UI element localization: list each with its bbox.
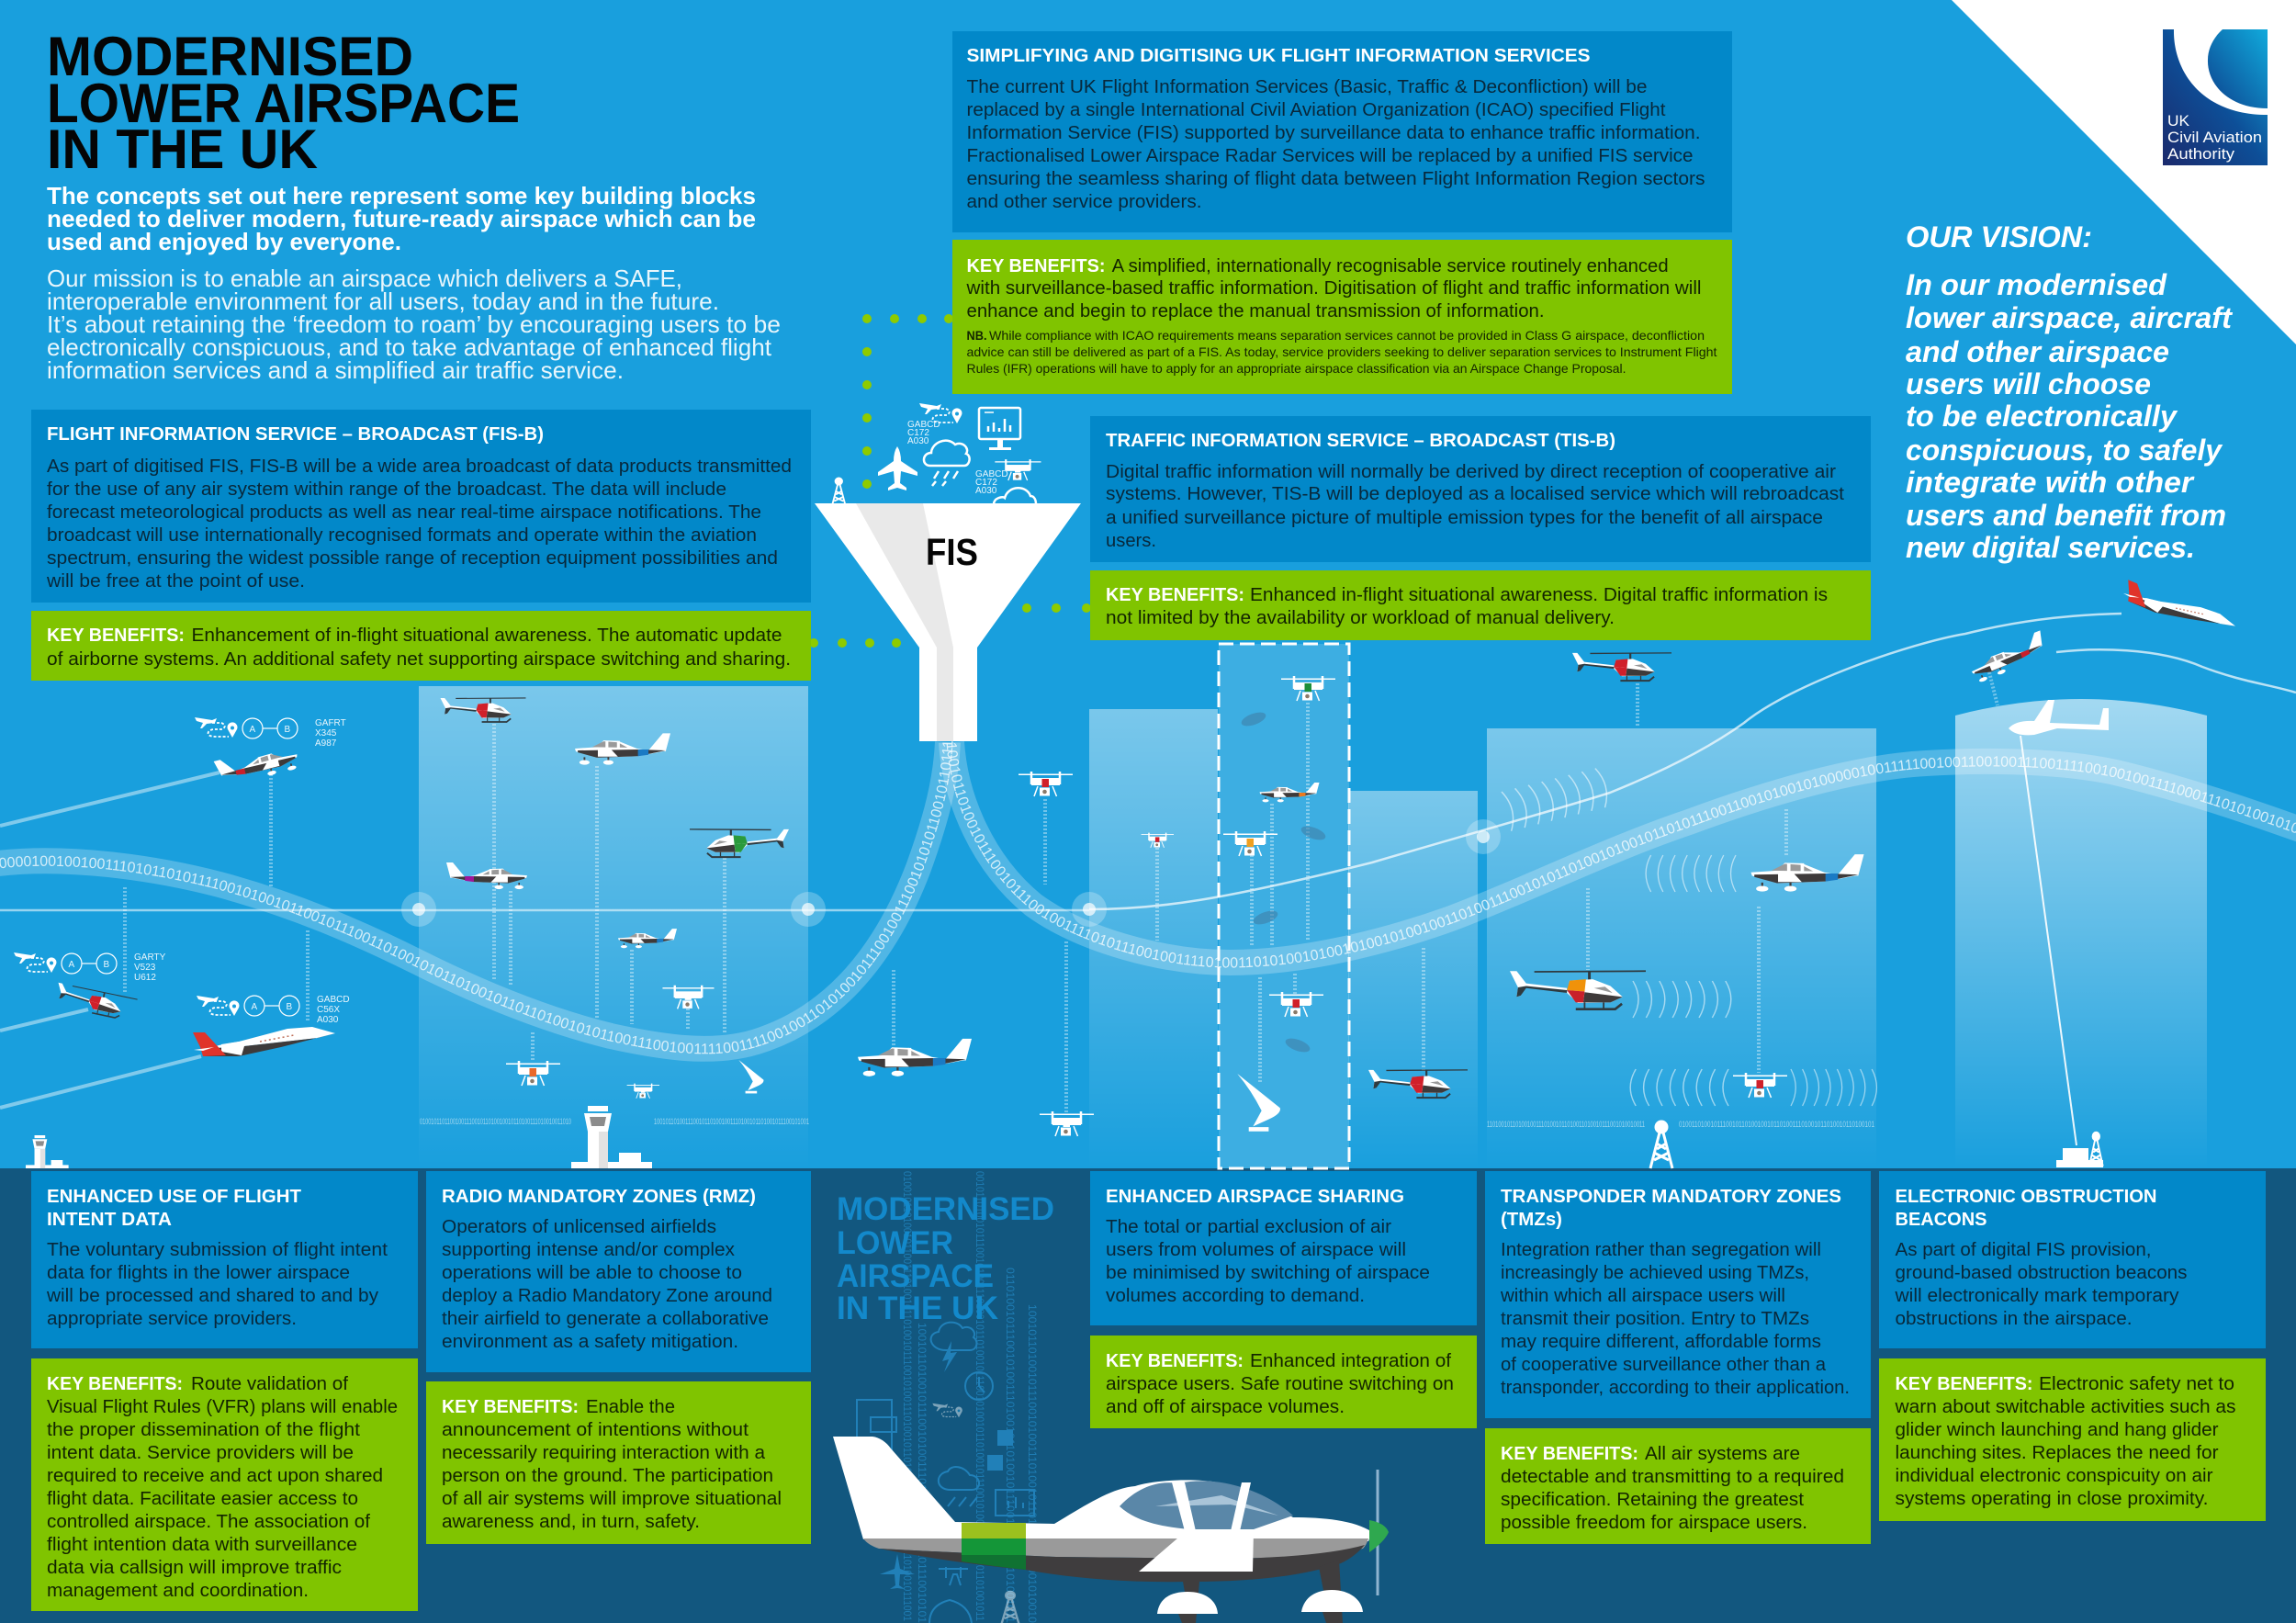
panel: simplifying and digitising: replaced by a single International Civil Aviation Organization (ICAO) specified Flight: [966, 100, 1666, 120]
logo: UK Civil Aviation Authority: UK: [2167, 112, 2190, 130]
flight intent data labels: A: [250, 725, 255, 735]
intro text: mission: interoperable environment for all users, today and in the future.: [47, 287, 719, 315]
panel: simplifying key benefits: NB.: [966, 328, 986, 343]
link nodes: [401, 819, 1501, 927]
panel: electronic obstruction beacons: As part of digital FIS provision,: [1896, 1240, 2151, 1260]
panel: radio mandatory zones key benefits: Enable the: [586, 1397, 675, 1417]
panel: TIS-B key benefits: KEY BENEFITS:: [1106, 585, 1244, 605]
binary data stream left: [0, 741, 961, 1062]
our vision statement: and other airspace: [1906, 335, 2169, 368]
flight intent data labels: A987: [315, 738, 337, 749]
panel: enhanced airspace sharing: be minimised by switching of airspace: [1106, 1263, 1430, 1283]
title: MODERNISED: [47, 26, 413, 87]
panel: transponder key benefits: possible freedom for airspace users.: [1501, 1513, 1807, 1533]
flight intent data labels: GAFRT: [315, 718, 346, 728]
flight intent data labels: GARTY: [134, 952, 166, 963]
binary data stream left: 0000010010010011101011010111100101001011001011100110100101011010010110110100101011001110010011110011110010011010100101110010011100101010110010110111001001011101110101110010110110: [0, 741, 953, 1054]
panel: airspace sharing key benefits: Enhanced integration of: [1250, 1351, 1451, 1371]
large aircraft illustration: [833, 1437, 1389, 1623]
FIS input icons: GABCD: [975, 469, 1008, 479]
flight intent data labels: B: [285, 725, 290, 735]
panel: TIS-B: Digital traffic information will normally be derived by direct reception of cooperative air: [1106, 462, 1836, 482]
flight intent data labels: X345: [315, 728, 337, 738]
our vision statement: integrate with other: [1906, 466, 2195, 499]
panel: flight intent key benefits: Visual Flight Rules (VFR) plans will enable: [47, 1397, 398, 1417]
panel: simplifying and digitising: Information Service (FIS) supported by surveillance data to enhance traffic information.: [966, 123, 1701, 143]
our vision statement: OUR VISION:: [1906, 220, 2092, 254]
sky background: [0, 0, 2296, 1171]
our vision statement: lower airspace, aircraft: [1906, 301, 2233, 334]
panel: enhanced airspace sharing: The total or partial exclusion of air: [1106, 1217, 1391, 1237]
panel: simplifying and digitising: SIMPLIFYING AND DIGITISING UK FLIGHT INFORMATION SERVICES: [966, 46, 1591, 66]
panel: simplifying key benefits: KEY BENEFITS:: [966, 256, 1106, 276]
panel: simplifying key benefits: Rules (IFR) operations will have to apply for an appropriate airspace classification via an Airspace Change Proposal.: [966, 361, 1626, 376]
dark lower band: [0, 1168, 2296, 1623]
binary base lines: 1001011010011100101101001001110100101101001011100101001: [654, 1117, 809, 1126]
panel: transponder key benefits: specification. Retaining the greatest: [1501, 1490, 1804, 1510]
panel: simplifying and digitising: ensuring the seamless sharing of flight data between Flight Information Region sectors: [966, 169, 1705, 189]
panel: flight intent key benefits: Route validation of: [191, 1374, 348, 1394]
panel: electronic obstruction beacons: ELECTRONIC OBSTRUCTION: [1896, 1187, 2156, 1207]
panel: obstruction beacons key benefits: Electronic safety net to: [2039, 1374, 2234, 1394]
intro text: mission: [47, 265, 781, 384]
panel: enhanced airspace sharing: ENHANCED AIRSPACE SHARING: [1106, 1187, 1404, 1207]
flight intent data labels: B: [103, 960, 110, 970]
panel: flight intent data: appropriate service providers.: [47, 1309, 297, 1329]
panel: transponder mandatory zones: within which all airspace users will: [1500, 1286, 1785, 1306]
central panel background pattern: [901, 1171, 1039, 1623]
panel: simplifying key benefits: A simplified, internationally recognisable service routinely enhanced: [1112, 256, 1669, 276]
panel: flight intent key benefits: KEY BENEFITS:: [47, 1374, 183, 1394]
panel: airspace sharing key benefits: KEY BENEFITS:: [1106, 1351, 1244, 1371]
panel: airspace sharing key benefits: [1090, 1336, 1477, 1428]
panel: FIS-B: spectrum, ensuring the widest possible range of reception equipment possibilities and: [47, 548, 778, 569]
binary data stream right: [939, 741, 2296, 975]
panel: radio mandatory zones: supporting intense and/or complex: [442, 1240, 735, 1260]
panel: simplifying key benefits: advice can still be delivered as part of a FIS. As today, service providers seeking to deliver separation services to Instrument Flight: [966, 344, 1717, 359]
our vision statement: users and benefit from: [1906, 499, 2226, 532]
panel: TIS-B: a unified surveillance picture of multiple emission types for the benefit of all airspace: [1106, 508, 1823, 528]
intro text: bold statement: [47, 182, 756, 255]
flight intent data labels: [14, 717, 350, 1025]
panel: electronic obstruction beacons: will electronically mark temporary: [1894, 1286, 2178, 1306]
binary data stream right: 100101101001011100101110010011110101110010011110100110101001010010100101001001101001110010101101001010010110101110011001010010100000100111110010011001001110011110010010011110001110101001010010101001101001110100101101: [946, 743, 2296, 968]
panel: simplifying and digitising: The current UK Flight Information Services (Basic, Traffic & Deconfliction) will be: [966, 77, 1648, 97]
panel: radio mandatory zones key benefits: of all air systems will improve situational: [442, 1489, 782, 1509]
binary base lines: 1101001011010010011101001011010011010010111001010010011: [1487, 1120, 1645, 1129]
panel: radio mandatory zones: their airfield to generate a collaborative: [442, 1309, 769, 1329]
binary base lines: [420, 1117, 1874, 1129]
logo: UK Civil Aviation Authority: Civil Aviation: [2167, 129, 2262, 146]
panel: radio mandatory zones key benefits: announcement of intentions without: [442, 1420, 748, 1440]
our vision statement: conspicuous, to safely: [1906, 434, 2223, 467]
flight intent data labels: U612: [134, 973, 156, 983]
FIS funnel: [815, 503, 1081, 741]
panel: transponder mandatory zones: Integration rather than segregation will: [1501, 1240, 1821, 1260]
FIS input icons: GABCD: [907, 420, 940, 430]
panel: TIS-B: users.: [1106, 531, 1156, 551]
intro text: mission: electronically conspicuous, and to take advantage of enhanced flight: [47, 333, 772, 361]
panel: TIS-B key benefits: Enhanced in-flight situational awareness. Digital traffic information is: [1250, 585, 1828, 605]
panel: electronic obstruction beacons: obstructions in the airspace.: [1896, 1309, 2133, 1329]
FIS input icons: C172: [907, 428, 929, 438]
intro text: mission: Our mission is to enable an airspace which delivers a SAFE,: [47, 265, 682, 292]
panel: transponder key benefits: detectable and transmitting to a required: [1501, 1467, 1844, 1487]
panel: simplifying and digitising: and other service providers.: [966, 192, 1201, 212]
panel: flight intent key benefits: the proper dissemination of the flight: [47, 1420, 360, 1440]
panel: radio mandatory zones: deploy a Radio Mandatory Zone around: [442, 1286, 772, 1306]
flight intent data labels: C56X: [317, 1005, 340, 1015]
antenna and obstruction beacon: [1650, 1121, 2103, 1168]
panel: TIS-B: systems. However, TIS-B will be deployed as a localised service which will rebroadcast: [1106, 484, 1844, 504]
airspace volume columns: [419, 686, 2207, 1168]
central panel background pattern: 10010110100101110010100111010010110100101110010101: [916, 1323, 929, 1623]
panel: transponder mandatory zones: increasingly be achieved using TMZs,: [1501, 1263, 1809, 1283]
panel: electronic obstruction beacons: ground-based obstruction beacons: [1896, 1263, 2188, 1283]
flight intent data labels: GABCD: [317, 995, 350, 1005]
panel: transponder mandatory zones: transmit their position. Entry to TMZs: [1501, 1309, 1809, 1329]
panel: radio mandatory zones key benefits: necessarily requiring interaction with a: [442, 1443, 766, 1463]
panel: FIS-B: for the use of any air system within range of the broadcast. The data will include: [47, 479, 726, 500]
panel: FIS-B: will be free at the point of use.: [46, 571, 305, 592]
central panel title: [837, 1191, 1054, 1326]
our vision statement: In our modernised: [1906, 268, 2167, 301]
panel: radio mandatory zones key benefits: [426, 1381, 811, 1544]
panel: electronic obstruction beacons: BEACONS: [1896, 1210, 1987, 1230]
connector dots: [809, 314, 1091, 648]
panel: FIS-B key benefits: KEY BENEFITS:: [47, 626, 185, 646]
flight intent data labels: A030: [317, 1015, 339, 1025]
panel: simplifying key benefits: with surveillance-based traffic information. Digitisation of flight and traffic information will: [965, 278, 1701, 299]
panel: radio mandatory zones: operations will be able to choose to: [442, 1263, 742, 1283]
panel: flight intent key benefits: flight data. Facilitate easier access to: [47, 1489, 358, 1509]
intro text: bold statement: The concepts set out here represent some key building blocks: [47, 182, 756, 209]
panel: radio mandatory zones key benefits: KEY BENEFITS:: [442, 1397, 579, 1417]
panel: transponder mandatory zones: of cooperative surveillance other than a: [1501, 1355, 1827, 1375]
title: IN THE UK: [47, 118, 318, 180]
panel: radio mandatory zones key benefits: awareness and, in turn, safety.: [442, 1512, 700, 1532]
panel: airspace sharing key benefits: airspace users. Safe routine switching on: [1106, 1374, 1454, 1394]
panel: flight intent data: INTENT DATA: [47, 1210, 172, 1230]
panel: airspace sharing key benefits: and off of airspace volumes.: [1106, 1397, 1345, 1417]
central panel title: MODERNISED: [837, 1191, 1054, 1227]
panel: TIS-B key benefits: [1090, 570, 1871, 640]
panel: obstruction beacons key benefits: glider winch launching and hang glider: [1896, 1420, 2219, 1440]
panel: transponder mandatory zones: (TMZs): [1501, 1210, 1562, 1230]
panel: simplifying and digitising: Fractionalised Lower Airspace Radar Services will be replaced by a unified FIS service: [966, 146, 1694, 166]
horizontal link line and traffic trails: [0, 614, 2296, 1145]
title: [47, 26, 520, 180]
flight intent data labels: V523: [134, 963, 156, 973]
intro text: mission: information services and a simplified air traffic service.: [47, 356, 624, 384]
panel: electronic obstruction beacons: [1879, 1171, 2266, 1348]
panel: transponder mandatory zones: [1485, 1171, 1871, 1418]
panel: transponder key benefits: KEY BENEFITS:: [1501, 1444, 1638, 1464]
our vision statement: users will choose: [1906, 367, 2151, 400]
panel: simplifying key benefits: [952, 240, 1732, 394]
panel: obstruction beacons key benefits: launching sites. Replaces the need for: [1896, 1443, 2219, 1463]
panel: transponder mandatory zones: transponder, according to their application.: [1501, 1378, 1850, 1398]
panel: radio mandatory zones: Operators of unlicensed airfields: [442, 1217, 716, 1237]
panel: flight intent key benefits: controlled airspace. The association of: [47, 1512, 370, 1532]
panel: FIS-B: As part of digitised FIS, FIS-B will be a wide area broadcast of data products transmitted: [47, 456, 792, 477]
panel: flight intent data: will be processed and shared to and by: [46, 1286, 378, 1306]
title: LOWER AIRSPACE: [47, 73, 520, 134]
flight intent data labels: A: [252, 1002, 257, 1012]
white top right corner: [1952, 0, 2296, 344]
panel: flight intent key benefits: intent data. Service providers will be: [47, 1443, 354, 1463]
panel: radio mandatory zones: environment as a safety mitigation.: [442, 1332, 738, 1352]
binary base lines: 0100101101100100111001011010010010110100111010010011010: [420, 1117, 571, 1126]
panel: transponder key benefits: All air systems are: [1645, 1444, 1800, 1464]
intro text: mission: It’s about retaining the ‘freedom to roam’ by encouraging users to be: [47, 310, 781, 338]
control towers: [26, 1106, 652, 1168]
our vision statement: new digital services.: [1906, 531, 2195, 564]
panel: obstruction beacons key benefits: individual electronic conspicuity on air: [1896, 1466, 2213, 1486]
central panel faint icons: [857, 1323, 1034, 1623]
panel: flight intent data: [31, 1171, 418, 1348]
dashed airspace sharing volume: [1219, 644, 1349, 1168]
panel: FIS-B key benefits: Enhancement of in-flight situational awareness. The automatic update: [191, 626, 782, 646]
panel: obstruction beacons key benefits: warn about switchable activities such as: [1894, 1397, 2235, 1417]
panel: radio mandatory zones: [426, 1171, 811, 1372]
panel: TIS-B: [1090, 416, 1871, 562]
panel: TIS-B: TRAFFIC INFORMATION SERVICE – BROADCAST (TIS-B): [1106, 431, 1615, 451]
FIS input icons: A030: [975, 486, 997, 496]
panel: radio mandatory zones: RADIO MANDATORY ZONES (RMZ): [442, 1187, 756, 1207]
logo: UK Civil Aviation Authority: [2163, 29, 2268, 165]
panel: transponder mandatory zones: may require different, affordable forms: [1501, 1332, 1821, 1352]
panel: enhanced airspace sharing: volumes according to demand.: [1106, 1286, 1365, 1306]
panel: FIS-B: broadcast will use internationally recognised formats and operate within the aviation: [47, 525, 757, 546]
central panel title: AIRSPACE: [837, 1258, 994, 1294]
obscured traffic silhouettes: [1240, 710, 1327, 1054]
panel: FIS-B: [31, 410, 811, 603]
panel: FIS-B key benefits: [31, 611, 811, 681]
panel: flight intent data: The voluntary submission of flight intent: [47, 1240, 388, 1260]
intro text: bold statement: needed to deliver modern, future-ready airspace which can be: [47, 205, 756, 232]
logo: UK Civil Aviation Authority: Authority: [2167, 145, 2235, 163]
white glider: [2009, 700, 2109, 735]
surveillance dotted lines: [125, 672, 1998, 1112]
aircraft: right section: [1142, 576, 2237, 1129]
signal arcs: [1502, 767, 1876, 1106]
panel: flight intent key benefits: flight intention data with surveillance: [47, 1535, 357, 1555]
central panel background pattern: 0110100101110010100111010010110100101110010100101101001011: [1004, 1268, 1017, 1623]
FIS input icons: A030: [907, 436, 929, 446]
FIS input icons: [832, 403, 1041, 506]
flight intent data labels: A: [68, 960, 75, 970]
panel: transponder key benefits: [1485, 1428, 1871, 1544]
central panel background pattern: 1001011010010111001010011101001011010010111001010010: [1026, 1304, 1039, 1623]
panel: enhanced airspace sharing: [1090, 1171, 1477, 1325]
central panel title: IN THE UK: [837, 1291, 998, 1326]
panel: FIS-B key benefits: of airborne systems. An additional safety net supporting airspace switching and sharing.: [47, 649, 791, 670]
aircraft: left section: [53, 698, 1094, 1136]
panel: flight intent key benefits: management and coordination.: [47, 1581, 309, 1601]
panel: flight intent key benefits: required to receive and act upon shared: [47, 1466, 383, 1486]
panel: transponder mandatory zones: TRANSPONDER MANDATORY ZONES: [1501, 1187, 1841, 1207]
intro text: bold statement: used and enjoyed by everyone.: [47, 228, 401, 255]
panel: obstruction beacons key benefits: systems operating in close proximity.: [1896, 1489, 2208, 1509]
panel: radio mandatory zones key benefits: person on the ground. The participation: [442, 1466, 773, 1486]
our vision statement: [1906, 220, 2233, 564]
panel: enhanced airspace sharing: users from volumes of airspace will: [1106, 1240, 1406, 1260]
panel: flight intent key benefits: [31, 1358, 418, 1611]
panel: flight intent key benefits: data via callsign will improve traffic: [47, 1558, 342, 1578]
panel: obstruction beacons key benefits: [1879, 1358, 2266, 1521]
panel: simplifying key benefits: enhance and begin to replace the manual transmission of information.: [966, 301, 1545, 321]
panel: simplifying key benefits: While compliance with ICAO requirements means separation services cannot be provided in Class G airspace, deconfliction: [989, 328, 1705, 343]
panel: TIS-B key benefits: not limited by the availability or workload of manual delivery.: [1106, 608, 1615, 628]
panel: FIS-B: FLIGHT INFORMATION SERVICE – BROADCAST (FIS-B): [47, 424, 544, 445]
panel: flight intent data: ENHANCED USE OF FLIGHT: [47, 1187, 301, 1207]
panel: FIS-B: forecast meteorological products as well as near real-time airspace notifications. The: [47, 502, 761, 523]
panel: simplifying and digitising: [952, 31, 1732, 232]
central panel title: LOWER: [837, 1225, 953, 1261]
panel: obstruction beacons key benefits: KEY BENEFITS:: [1896, 1374, 2033, 1394]
flight intent data labels: B: [287, 1002, 292, 1012]
our vision statement: to be electronically: [1906, 400, 2178, 433]
binary base lines: 01001101001011100101101001001011010011101001011010010110100101: [1679, 1120, 1874, 1129]
FIS funnel: FIS: [926, 531, 978, 573]
FIS input icons: C172: [975, 478, 997, 488]
panel: flight intent data: data for flights in the lower airspace: [47, 1263, 350, 1283]
